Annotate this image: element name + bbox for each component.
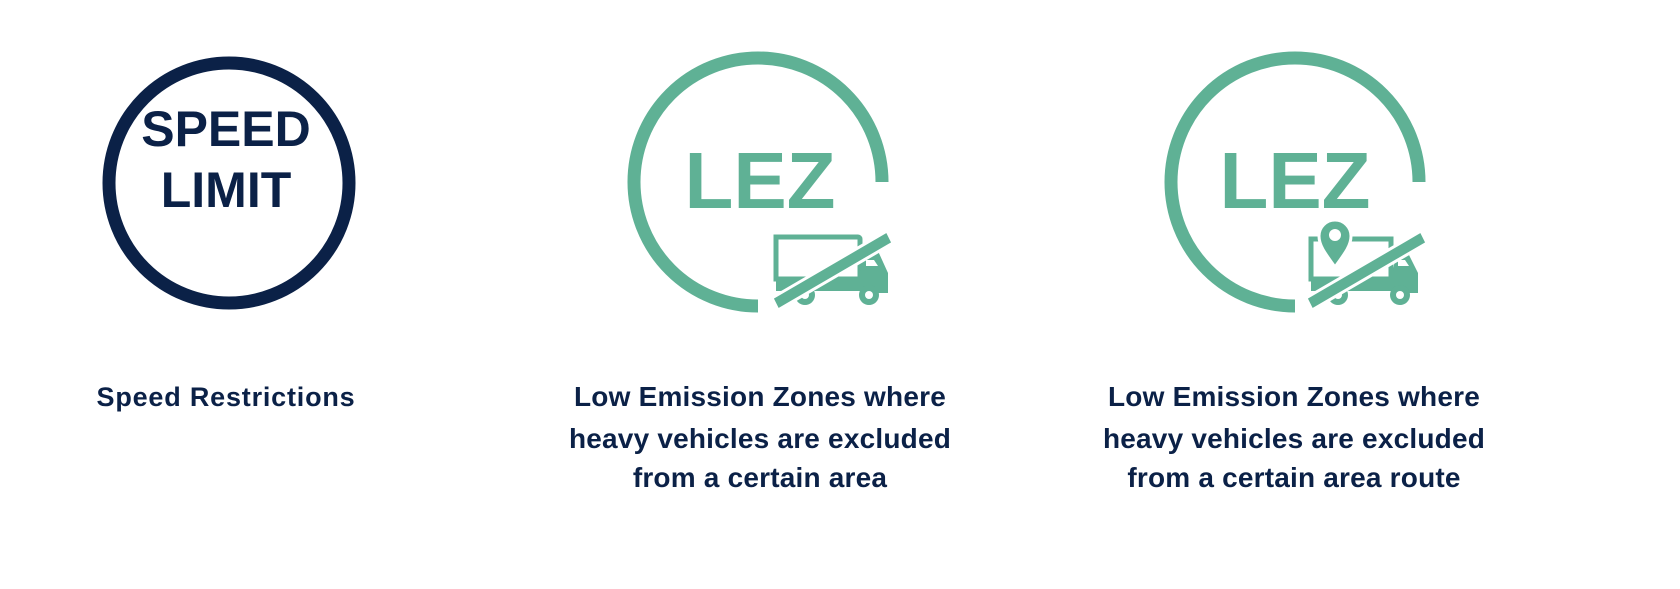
caption: LEZ area: from a certain area <box>633 462 887 493</box>
caption: speed restrictions: Speed Restrictions <box>97 382 355 412</box>
icon: truck with pin <box>1306 220 1427 310</box>
icon: speed limit <box>109 63 349 303</box>
icon: LEZ truck excluded <box>634 58 893 310</box>
caption: LEZ route: Low Emission Zones where <box>1108 381 1480 412</box>
icon: truck <box>772 231 893 310</box>
caption: LEZ area: heavy vehicles are excluded <box>569 423 951 454</box>
icon: LEZ truck route: LEZ <box>1219 136 1371 225</box>
caption: LEZ route <box>1103 381 1485 493</box>
caption: LEZ area <box>569 381 951 493</box>
icon: speed limit: SPEED <box>141 101 311 157</box>
caption: LEZ route: from a certain area route <box>1127 462 1461 493</box>
caption: LEZ route: heavy vehicles are excluded <box>1103 423 1485 454</box>
caption: LEZ area: Low Emission Zones where <box>574 381 946 412</box>
icon: speed limit: LIMIT <box>161 162 291 218</box>
icon: LEZ truck route <box>1171 58 1427 310</box>
icon: LEZ truck excluded: LEZ <box>684 136 836 225</box>
